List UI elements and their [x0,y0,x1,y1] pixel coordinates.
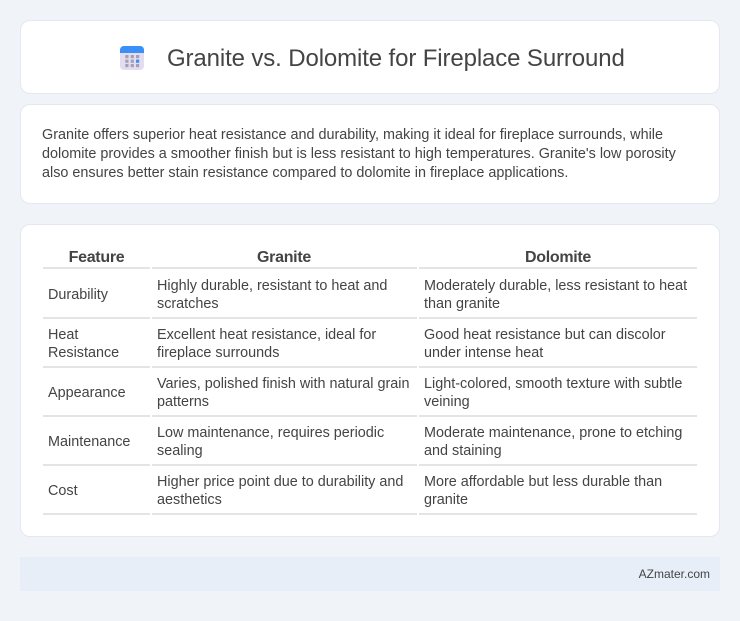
text: fireplace surrounds [157,345,279,361]
text: veining [424,394,470,410]
text: Low maintenance, requires periodic [157,425,384,441]
table header: Feature: Feature [69,249,124,266]
text: Maintenance [48,434,130,450]
row: Appearance [48,376,682,410]
text: Heat [48,327,78,343]
text: patterns [157,394,209,410]
text: More affordable but less durable than [424,474,662,490]
row: Heat Resistance [48,327,666,361]
text: Moderate maintenance, prone to etching [424,425,682,441]
text: Good heat resistance but can discolor [424,327,666,343]
panel: title card [20,20,720,94]
text: under intense heat [424,345,543,361]
text: granite [424,492,468,508]
text: Moderately durable, less resistant to heat [424,278,687,294]
text: Highly durable, resistant to heat and [157,278,387,294]
panel: comparison table card [20,224,720,537]
text: Varies, polished finish with natural grain [157,376,410,392]
text: sealing [157,443,203,459]
row: Maintenance [48,425,682,459]
panel: summary [20,104,720,204]
text: Resistance [48,345,119,361]
text: Light-colored, smooth texture with subtle [424,376,682,392]
text: aesthetics [157,492,222,508]
footer bar [20,557,720,591]
table header: Granite: Granite [257,249,311,266]
table header: Dolomite: Dolomite [525,249,591,266]
text: Durability [48,287,108,303]
text: Appearance [48,385,126,401]
text: Cost [48,483,78,499]
text: scratches [157,296,219,312]
text: and staining [424,443,502,459]
title: Granite vs. Dolomite for Fireplace Surround [167,45,625,72]
footer credit: AZmater.com [639,567,710,581]
summary text [42,126,676,181]
text: than granite [424,296,500,312]
text: Excellent heat resistance, ideal for [157,327,376,343]
row: Cost [48,474,662,508]
summary text: also ensures better stain resistance compared to dolomite in fireplace applications. [42,165,568,181]
text: Higher price point due to durability and [157,474,403,490]
summary text: Granite offers superior heat resistance and durability, making it ideal for fireplace surrounds, while [42,126,663,142]
row: Durability [48,278,688,312]
summary text: dolomite provides a smoother finish but is less resistant to high temperatures. Granite's low porosity [42,146,676,162]
icon: calendar [120,46,144,70]
